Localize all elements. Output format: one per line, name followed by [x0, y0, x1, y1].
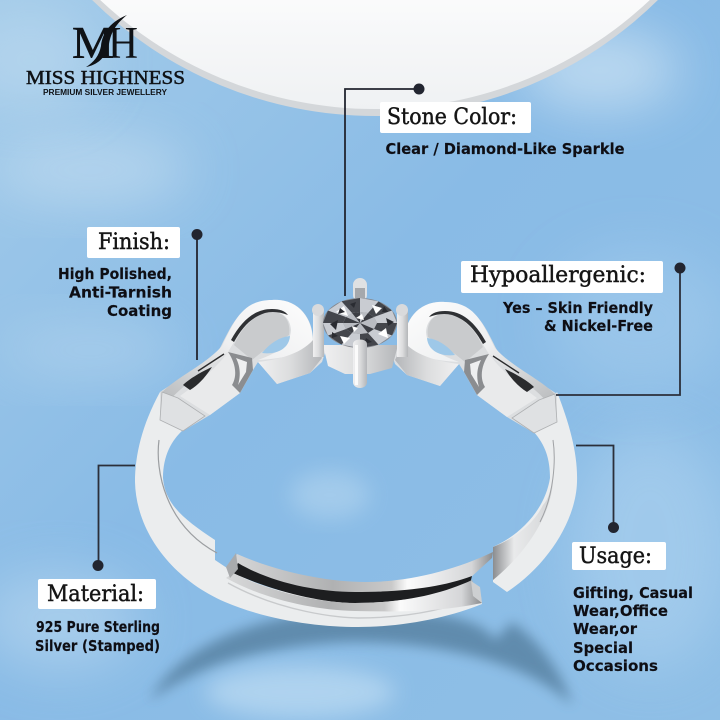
- description: Gifting, Casual: [573, 584, 693, 602]
- monogram MH: [72, 15, 138, 68]
- central setting with stone: [312, 278, 408, 388]
- heading chip: Hypoallergenic:: [470, 263, 646, 288]
- description: [573, 584, 693, 675]
- diamond: [323, 298, 397, 348]
- callout: hypoallergenic: [461, 261, 686, 395]
- description: Anti-Tarnish: [69, 284, 172, 302]
- description: Coating: [107, 302, 172, 320]
- white dome at top: [0, 0, 720, 116]
- brand name: MISS HIGHNESS: [26, 68, 185, 89]
- description: High Polished,: [58, 265, 172, 283]
- monogram MH: M: [72, 18, 114, 68]
- left flourish: [160, 300, 326, 431]
- heading chip: Finish:: [98, 230, 170, 255]
- basket: [312, 304, 408, 374]
- callout: usage: [572, 446, 693, 675]
- description: Wear,Office: [573, 602, 668, 620]
- heading chip: [461, 261, 663, 293]
- description: 925 Pure Sterling: [36, 618, 160, 636]
- heading chip: [87, 227, 180, 258]
- description: Special: [573, 639, 633, 657]
- monogram MH: H: [108, 18, 138, 68]
- adjustable slider strips: [226, 552, 493, 596]
- heading chip: Material:: [47, 582, 144, 607]
- leader line: [556, 262, 686, 395]
- front prong: [353, 340, 367, 388]
- callout: finish: [58, 227, 202, 360]
- description: Silver (Stamped): [35, 637, 160, 655]
- description: [35, 618, 160, 655]
- leader line: [192, 229, 202, 360]
- heading chip: Stone Color:: [387, 105, 517, 130]
- logo: [26, 15, 185, 97]
- description: Occasions: [573, 657, 658, 675]
- top prong: [353, 278, 367, 302]
- right flourish: [391, 302, 557, 433]
- ring band right: [493, 392, 577, 592]
- tagline: PREMIUM SILVER JEWELLERY: [43, 88, 168, 97]
- callout: material: [35, 466, 160, 655]
- callout: stone color: [345, 84, 624, 296]
- description: Clear / Diamond-Like Sparkle: [386, 140, 624, 158]
- description: & Nickel-Free: [544, 317, 653, 335]
- ring band left and bottom: [135, 392, 482, 627]
- description: Yes – Skin Friendly: [502, 299, 653, 317]
- leader line: [345, 84, 424, 296]
- leader line: [576, 446, 619, 533]
- ring: [135, 278, 577, 627]
- heading chip: Usage:: [579, 544, 652, 569]
- description: [502, 299, 653, 335]
- description: Wear,or: [573, 620, 638, 638]
- leader line: [92, 466, 135, 571]
- description: [58, 265, 172, 320]
- ring reflection: [150, 610, 572, 718]
